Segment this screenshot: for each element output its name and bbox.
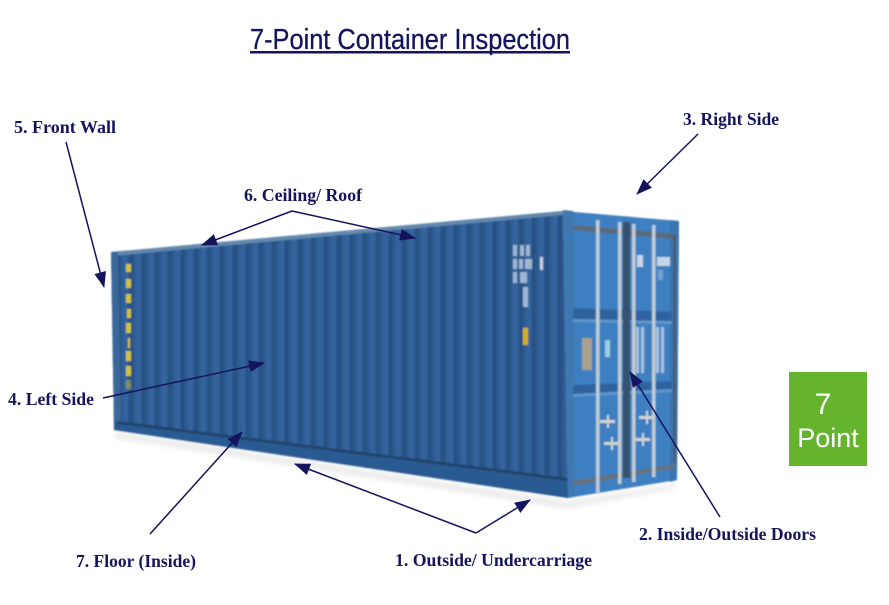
yellow side lettering: [126, 264, 131, 389]
title: 7-Point Container Inspection: [250, 24, 570, 56]
container left side: [111, 211, 568, 498]
ground shadow: [116, 432, 676, 508]
label: right side: 3. Right Side: [683, 109, 779, 129]
badge: 7 point: [789, 372, 867, 466]
arrow: floor: [150, 432, 242, 534]
shipping container photo: [111, 210, 679, 508]
container door end: [563, 210, 679, 498]
arrows: ceiling and roof: [202, 211, 415, 245]
arrow: front wall: [66, 142, 104, 287]
arrow: doors: [630, 372, 720, 517]
door plates and markings: [582, 338, 592, 370]
door handles: [600, 411, 654, 450]
label: ceiling and roof: 6. Ceiling/ Roof: [244, 185, 363, 205]
arrow: left side: [103, 363, 264, 398]
label: left side: 4. Left Side: [8, 389, 94, 409]
label: outside undercarriage: 1. Outside/ Undercarriage: [395, 550, 592, 570]
arrow: right side: [637, 134, 698, 194]
label: doors: 2. Inside/Outside Doors: [639, 524, 816, 544]
locking rods: [596, 220, 656, 494]
label: front wall: 5. Front Wall: [14, 117, 116, 137]
side markings: [513, 245, 543, 307]
label: floor: 7. Floor (Inside): [76, 551, 196, 572]
arrows: outside undercarriage: [295, 464, 530, 533]
badge: 7 point: 7: [815, 388, 831, 421]
badge: 7 point: Point: [797, 423, 859, 453]
